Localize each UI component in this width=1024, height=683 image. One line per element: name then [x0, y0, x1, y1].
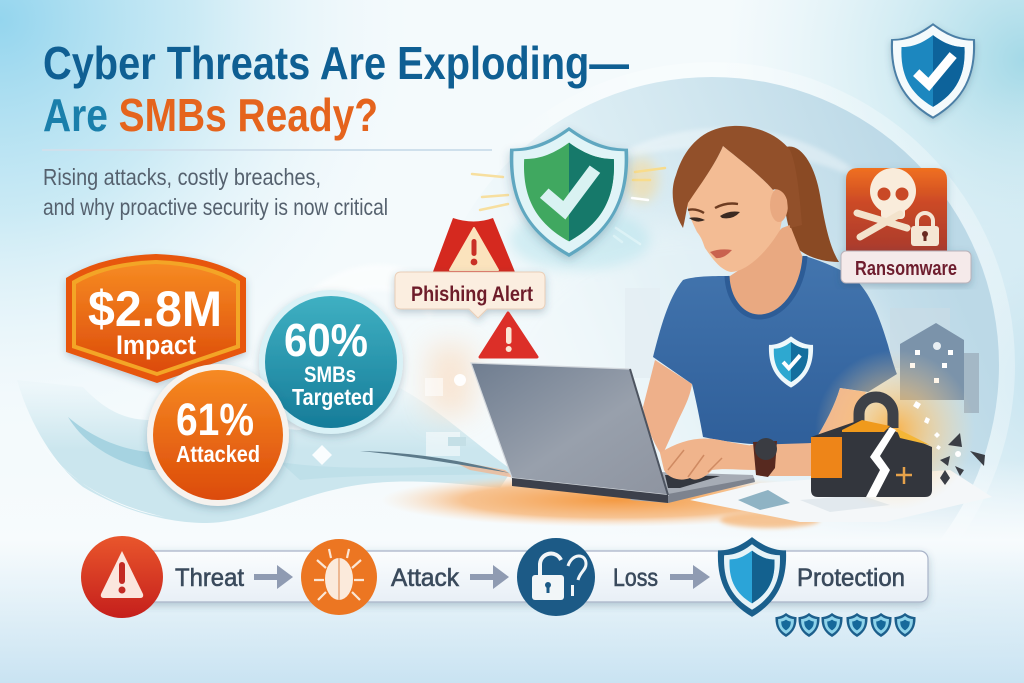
card with skull icon	[846, 168, 947, 253]
stat circle: 61% attacked: 61%	[176, 394, 254, 445]
neck	[727, 225, 803, 317]
step: protection label: Protection	[797, 564, 905, 592]
phishing alert	[395, 218, 545, 357]
title: Cyber Threats Are Exploding—	[43, 37, 629, 89]
left arm	[643, 360, 692, 456]
arrow	[254, 565, 293, 589]
step: loss label: Loss	[613, 564, 658, 592]
laptop screen	[471, 363, 668, 503]
step: protection icon	[718, 537, 786, 617]
icon: small warning triangle	[480, 313, 537, 357]
wristwatch	[753, 438, 777, 477]
step: attack label: Attack	[391, 564, 459, 592]
face	[687, 146, 786, 272]
hand on keyboard	[660, 439, 756, 480]
step: threat icon	[81, 536, 163, 618]
person	[643, 126, 897, 480]
step: threat label: Threat	[175, 564, 244, 592]
icon: skull	[857, 168, 916, 237]
step: attack icon	[301, 539, 377, 615]
lock body	[811, 420, 932, 497]
flow bar	[120, 551, 928, 602]
icon: green shield	[510, 127, 628, 257]
subtitle	[43, 164, 388, 220]
skyline, faint city behind person	[625, 288, 979, 413]
stat circle: 60% SMBs targeted	[259, 290, 403, 434]
decorative swooshes	[17, 265, 515, 523]
debris shards	[940, 433, 985, 485]
stat circle: 61% attacked	[147, 364, 289, 506]
icon: large warning triangle	[431, 218, 517, 277]
broken padlock	[811, 350, 985, 510]
title: Are SMBs Ready?	[43, 89, 378, 141]
desk glow and papers	[380, 470, 992, 528]
subtitle: Rising attacks, costly breaches,	[43, 164, 321, 190]
row of small shields	[775, 613, 916, 637]
hair	[673, 126, 802, 228]
stat badge: $2.8M impact: Impact	[116, 330, 196, 360]
stat circle: 60% SMBs targeted: Targeted	[292, 384, 374, 410]
step: loss icon	[517, 538, 595, 616]
laptop base	[630, 472, 755, 503]
stat circle: 60% SMBs targeted: 60%	[284, 314, 368, 366]
arrow	[470, 565, 509, 589]
process flow	[81, 536, 928, 637]
title rule	[42, 149, 492, 151]
t-shirt	[653, 256, 897, 445]
glow rays around green shield	[472, 158, 665, 270]
phishing alert label: Phishing Alert	[411, 283, 533, 306]
right arm and forearm	[750, 388, 866, 476]
ransomware card	[841, 168, 971, 283]
icon: padlock	[911, 213, 939, 246]
shackle	[859, 397, 893, 428]
face features: brows, eyes, mouth	[688, 204, 740, 258]
stat circle: 61% attacked: Attacked	[176, 441, 260, 467]
stat badge: $2.8M impact: $2.8M	[88, 281, 222, 337]
ransomware label: Ransomware	[855, 258, 957, 280]
collar	[727, 256, 805, 317]
ponytail	[783, 146, 839, 262]
ear	[770, 188, 788, 222]
shirt logo shield	[769, 336, 813, 388]
stat badge: $2.8M impact	[66, 254, 246, 383]
phishing alert label	[395, 272, 545, 318]
icon: top right shield	[891, 23, 975, 119]
title	[43, 37, 629, 141]
subtitle: and why proactive security is now critical	[43, 194, 388, 220]
stat circle: 60% SMBs targeted: SMBs	[304, 362, 356, 387]
arrow	[670, 565, 710, 589]
